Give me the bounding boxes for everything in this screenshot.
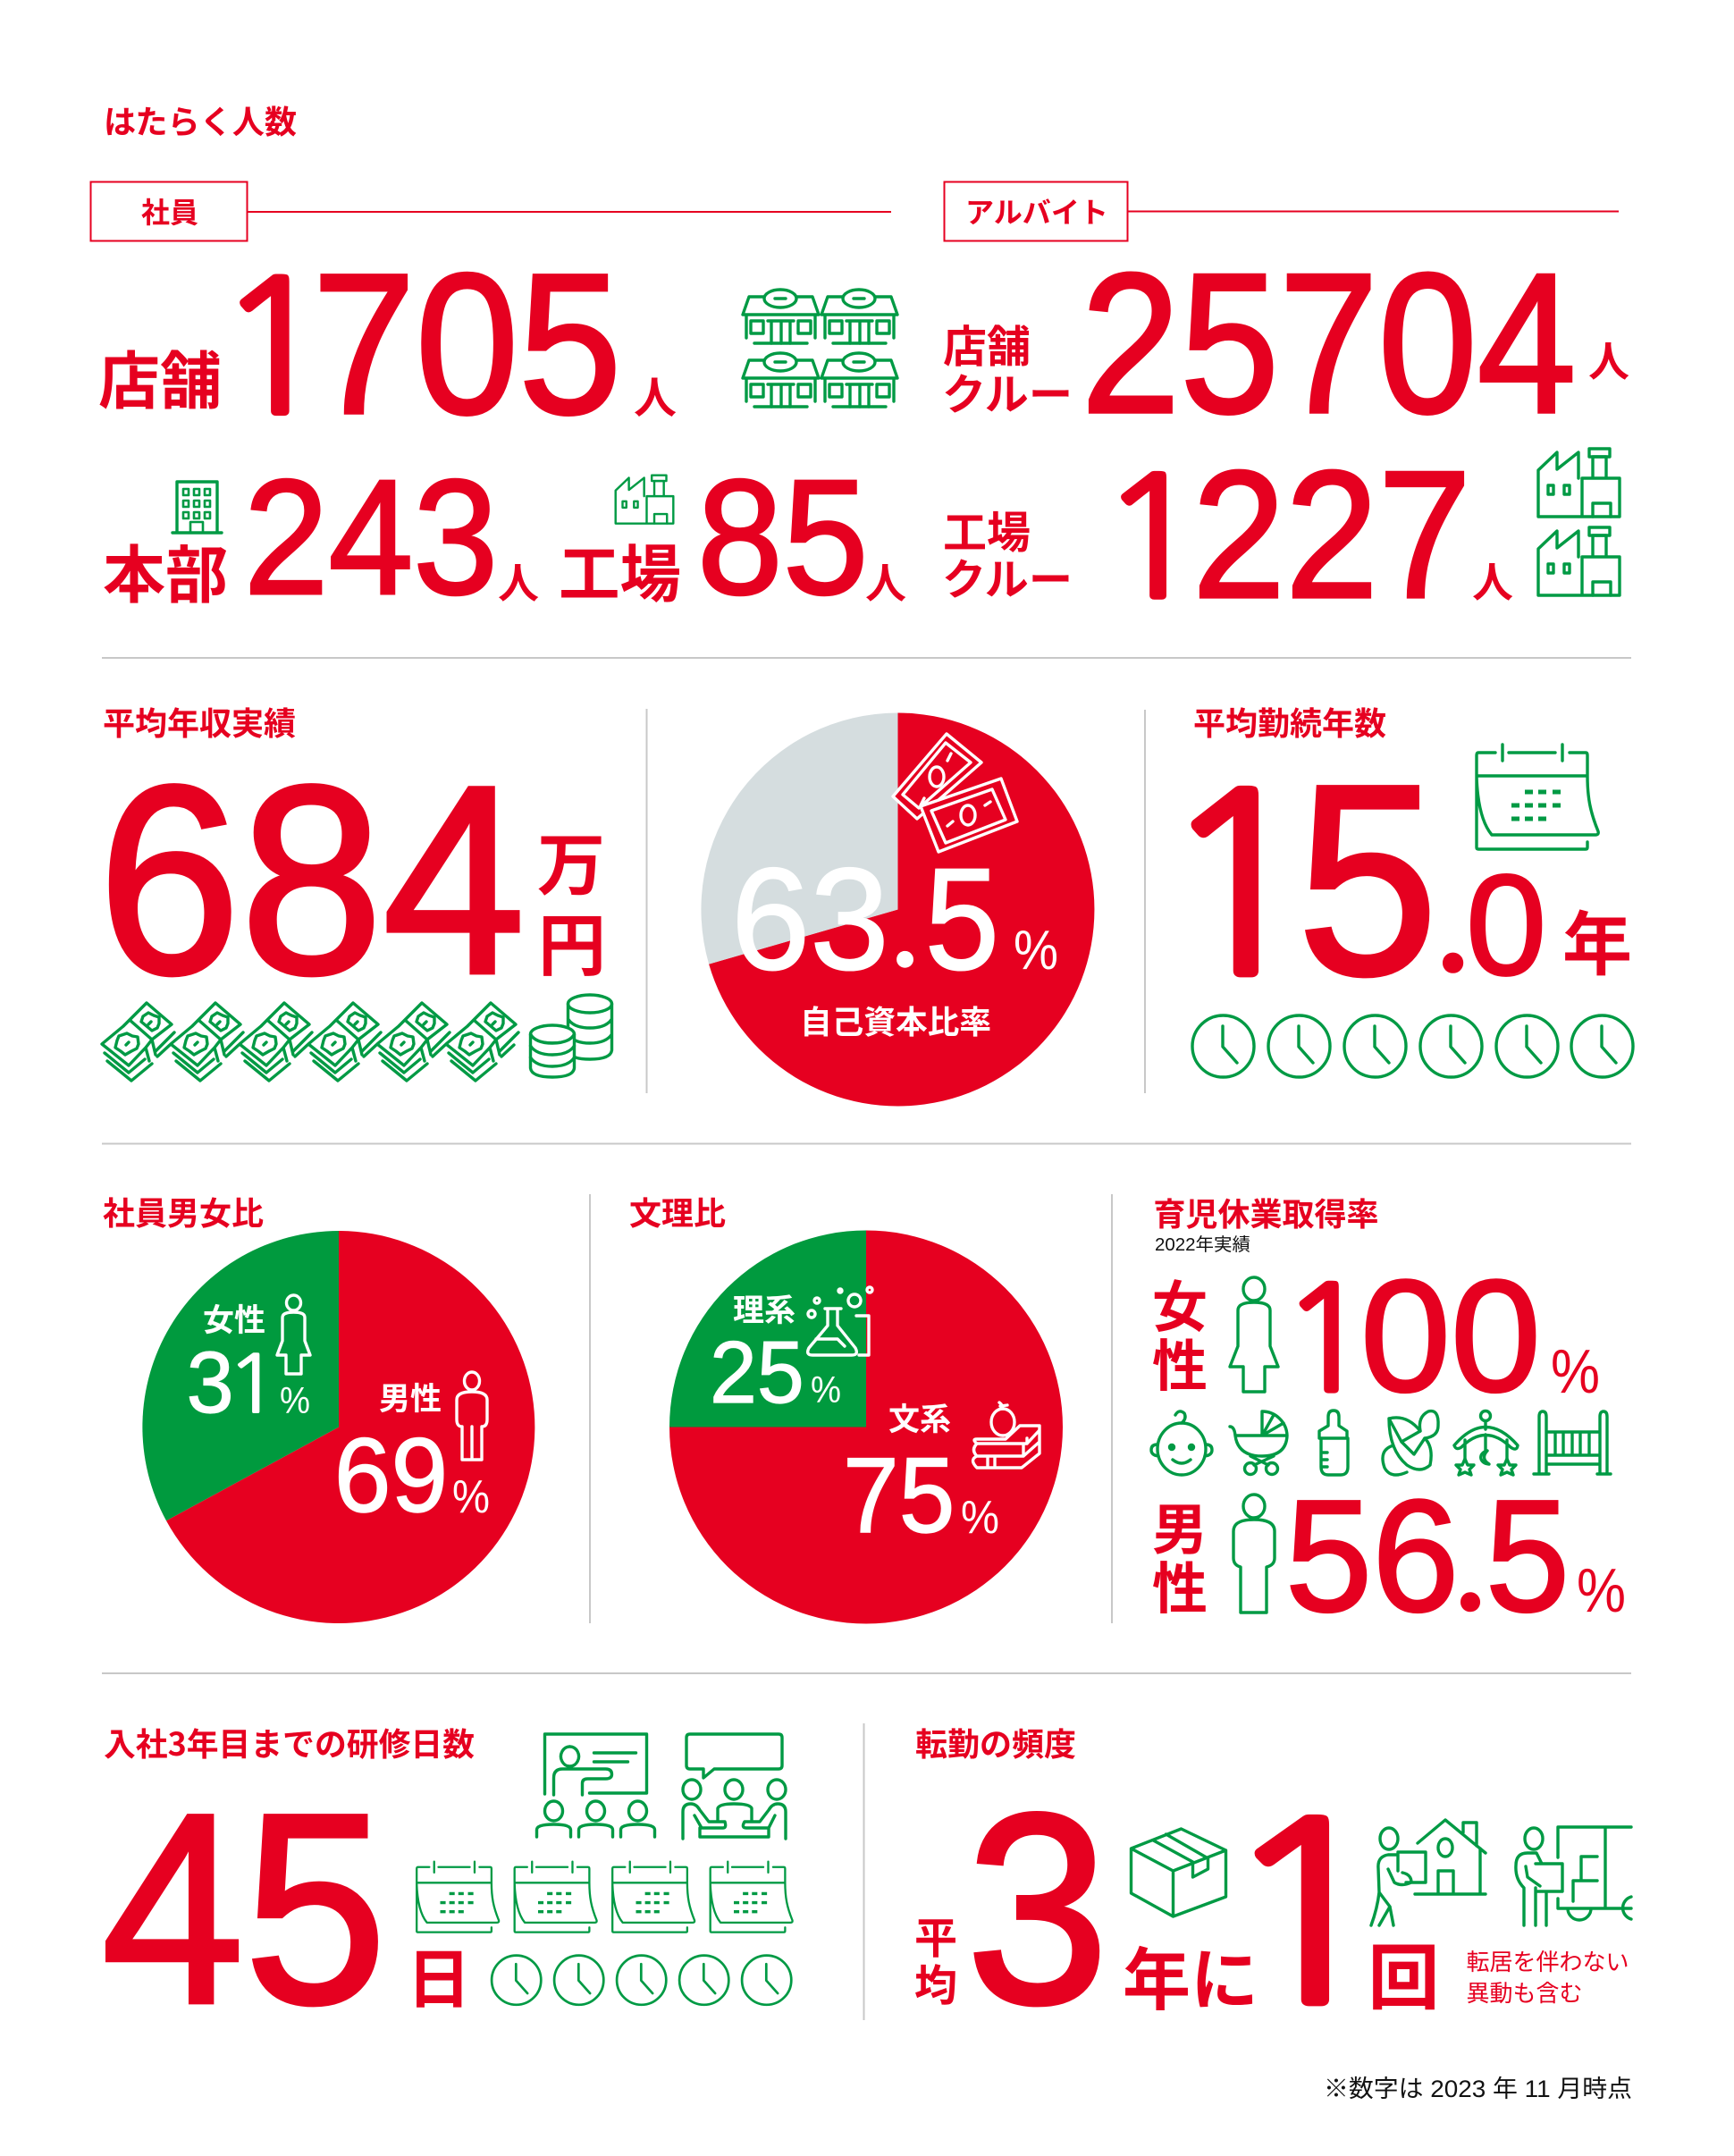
value: 69%: % — [452, 1471, 490, 1523]
icon: group discussion — [683, 1734, 786, 1839]
panel: 転勤の頻度 — [914, 1719, 1631, 2060]
label: 女性: 女 — [1152, 1262, 1208, 1343]
label: 工場クルー — [942, 498, 1073, 607]
value: 100%: % — [1551, 1336, 1600, 1406]
label: 女性: 女性 — [203, 1295, 265, 1341]
panel: 社員男女比 — [103, 1188, 535, 1623]
note: 転居を伴わない異動も含む — [1466, 1944, 1629, 2009]
value: 63.5%: . — [881, 832, 927, 982]
unit: 万円: 万 — [537, 811, 605, 909]
label: 店舗クルー: クルー — [942, 359, 1073, 422]
number: 15.0: . — [1425, 811, 1479, 990]
value: 69%: 69 — [334, 1417, 448, 1535]
unit: 人: 人 — [1472, 551, 1513, 610]
label: 店舗クルー — [942, 312, 1073, 422]
number: 85: 85 — [697, 445, 869, 628]
tag: アルバイト — [944, 182, 1619, 241]
icon: man — [457, 1372, 487, 1460]
value: 100%: 1 — [1279, 1267, 1374, 1412]
label: 男性: 性 — [1152, 1544, 1208, 1624]
icon: stroller — [1230, 1411, 1287, 1475]
icon: crib — [1534, 1411, 1611, 1474]
label: 男性: 男 — [1152, 1485, 1208, 1565]
heading: 平均勤続年数 — [1193, 698, 1386, 745]
icon: man — [1233, 1495, 1275, 1613]
tag: 社員: 社員 — [141, 190, 198, 232]
value: 31%: 3 — [187, 1334, 234, 1431]
pie chart — [669, 1230, 1063, 1623]
value: 31%: 1 — [225, 1344, 281, 1424]
label: 文系: 文系 — [888, 1394, 951, 1440]
icon: six money bundles — [102, 1003, 518, 1081]
value: 56.5%: 56 — [1285, 1467, 1459, 1645]
number: 15.0: 0 — [1466, 845, 1546, 1005]
icon: baby mobile — [1454, 1411, 1518, 1475]
icon: pacifier — [1383, 1411, 1438, 1475]
label: 工場: 工場 — [559, 525, 681, 615]
label: 平均: 平 — [914, 1903, 957, 1966]
label: 店舗クルー: 店舗 — [943, 312, 1031, 375]
unit: 人: 人 — [634, 363, 677, 425]
pie chart — [142, 1231, 535, 1623]
icon: person loading truck — [1516, 1827, 1631, 1925]
text: 年に: 年に — [1123, 1925, 1258, 2024]
panel: 文理比 — [629, 1188, 1063, 1623]
number: 1227: 227 — [1192, 434, 1471, 636]
value: 56.5%: . — [1444, 1458, 1495, 1628]
unit: 人: 人 — [865, 552, 906, 611]
label: 理系: 理系 — [733, 1285, 795, 1331]
unit: 万円 — [537, 811, 606, 990]
number: 684: 684 — [98, 729, 526, 1030]
unit: 人: 人 — [498, 552, 539, 611]
value: 25%: % — [811, 1369, 841, 1411]
note: 2022年実績: 2022年実績 — [1155, 1234, 1250, 1255]
value: 63.5%: 5 — [925, 838, 999, 1000]
icon: two factories — [1538, 449, 1620, 595]
heading: 育児休業取得率 — [1153, 1189, 1378, 1235]
panel: アルバイト headcount — [942, 182, 1629, 636]
panel: 平均年収実績 — [98, 698, 612, 1081]
heading: 文理比 — [629, 1188, 726, 1234]
footnote: ※数字は 2023 年 11 月時点 — [1324, 2076, 1632, 2102]
heading: 転勤の頻度 — [915, 1719, 1076, 1765]
label: 工場クルー: クルー — [942, 544, 1073, 607]
title: はたらく人数: はたらく人数 — [104, 97, 297, 143]
number: 15.0 — [1157, 729, 1546, 1032]
icon: factory small — [616, 476, 673, 524]
number: 1705: 1 — [214, 256, 333, 440]
icon: baby bottle — [1319, 1411, 1348, 1475]
heading: 平均年収実績 — [103, 698, 296, 745]
icon: woman — [1230, 1277, 1278, 1392]
note: 転居を伴わない異動も含む: 転居を伴わない — [1466, 1944, 1629, 1977]
tag: 社員 — [91, 182, 891, 241]
label: 平均 — [914, 1903, 957, 2013]
heading: 入社3年目までの研修日数 — [104, 1719, 475, 1765]
number: 243: 243 — [244, 445, 498, 628]
label: 女性 — [1152, 1262, 1208, 1402]
heading: 社員男女比 — [103, 1188, 264, 1234]
tag: アルバイト: アルバイト — [965, 190, 1108, 232]
icon: classroom lecture — [536, 1734, 654, 1837]
number: 3: 3 — [966, 1758, 1108, 2060]
label: 男性: 男性 — [379, 1374, 442, 1419]
note: 転居を伴わない異動も含む: 異動も含む — [1466, 1975, 1582, 2009]
value: 56.5%: 5 — [1486, 1467, 1570, 1645]
number: 1705: 705 — [313, 232, 622, 456]
unit: 回: 回 — [1368, 1921, 1439, 2025]
panel: 社員 headcount — [91, 182, 906, 628]
number: 1: 1 — [1216, 1790, 1395, 2039]
panel: 自己資本比率 pie chart — [701, 713, 1094, 1107]
icon: coin stacks — [531, 995, 611, 1077]
panel: 平均勤続年数 — [1157, 698, 1633, 1077]
icon: cardboard box — [1132, 1829, 1226, 1916]
number: 25704: 25704 — [1082, 232, 1577, 455]
pie chart — [701, 713, 1094, 1107]
value: 56.5% — [1285, 1458, 1626, 1645]
label: 女性: 性 — [1152, 1321, 1208, 1402]
label: 工場クルー: 工場 — [943, 498, 1031, 561]
icon: flask — [808, 1287, 872, 1355]
label: 自己資本比率: 自己資本比率 — [800, 997, 991, 1043]
value: 31% — [187, 1334, 310, 1431]
unit: 年: 年 — [1562, 889, 1632, 990]
panel: 入社3年目までの研修日数 — [102, 1719, 793, 2060]
number: 15.0: 1 — [1157, 762, 1318, 1010]
label: 店舗: 店舗 — [98, 332, 222, 422]
label: 本部: 本部 — [103, 526, 228, 616]
unit: 人: 人 — [1588, 330, 1629, 389]
value: 31%: % — [280, 1379, 310, 1421]
value: 63.5% — [731, 832, 1058, 1000]
label: 平均: 均 — [914, 1950, 957, 2013]
icon: baby face — [1151, 1411, 1212, 1475]
unit: 日: 日 — [407, 1927, 471, 2021]
number: 1227: 1 — [1098, 454, 1208, 621]
icon: five clocks — [492, 1956, 791, 2005]
value: 75%: 75 — [843, 1436, 955, 1555]
value: 100%: 00 — [1360, 1247, 1541, 1425]
icon: six clocks — [1192, 1015, 1633, 1077]
number: 45: 45 — [102, 1758, 387, 2060]
panel: 育児休業取得率 — [1151, 1189, 1626, 1645]
unit: 万円: 円 — [538, 891, 606, 990]
icon: four stores — [743, 290, 897, 407]
value: 25%: 25 — [710, 1323, 804, 1421]
label: 男性 — [1152, 1485, 1208, 1624]
value: 63.5%: % — [1014, 920, 1058, 981]
icon: calendar — [1477, 745, 1598, 849]
icon: office building — [173, 482, 222, 533]
icon: apple on books — [972, 1402, 1040, 1468]
value: 75%: % — [961, 1492, 999, 1544]
icon: four calendars — [417, 1862, 793, 1933]
icon: woman — [277, 1295, 310, 1374]
value: 56.5%: % — [1577, 1555, 1626, 1625]
number: 15.0: 5 — [1297, 729, 1438, 1032]
value: 63.5%: 63 — [731, 838, 889, 1000]
icon: person carrying box to house — [1371, 1820, 1486, 1925]
value: 100% — [1279, 1247, 1600, 1425]
icon: banknotes — [893, 734, 1017, 852]
